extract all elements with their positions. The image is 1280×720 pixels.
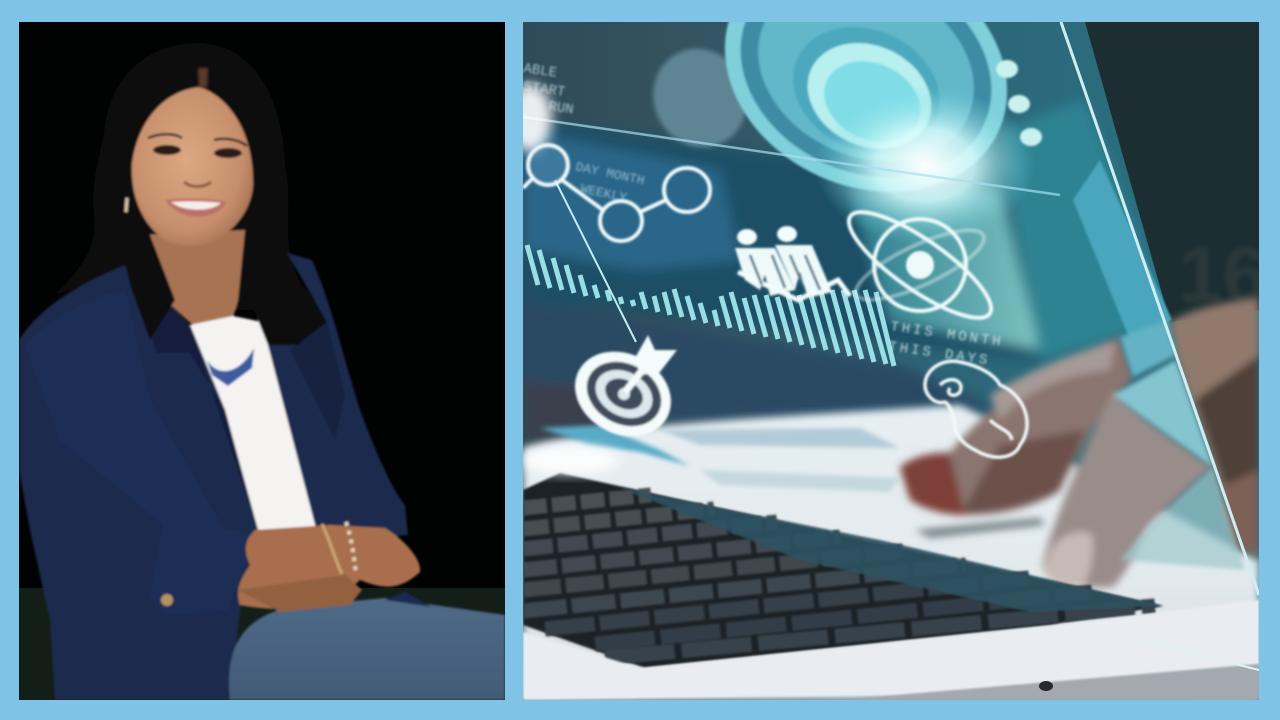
chart area backdrop (523, 120, 1040, 360)
teeth (171, 201, 221, 210)
right lapel shadow (290, 322, 345, 440)
earring (126, 198, 127, 212)
screen text top left (522, 61, 575, 118)
fingernail (1045, 532, 1093, 587)
subject figure (19, 43, 505, 700)
keyboard key rows (523, 495, 1155, 658)
icon: three dots (996, 60, 1042, 146)
left eyebrow (148, 134, 182, 138)
icon: brain (925, 361, 1027, 457)
dark room corner (1085, 22, 1259, 322)
floor behind subject (19, 588, 505, 700)
bar chart (527, 245, 894, 366)
parting (198, 68, 208, 88)
laptop lower edge (840, 664, 1259, 700)
finger shadow on desk (915, 518, 1045, 538)
icon: atom (836, 196, 1004, 334)
pearl bracelet (346, 522, 356, 574)
screen text top left: ABLE (522, 61, 558, 82)
noisy blue patch (523, 130, 740, 270)
sleeve cuff (150, 515, 255, 615)
lips (165, 199, 227, 217)
laptop port (1039, 681, 1053, 691)
icon: people on rising arrow (735, 226, 850, 300)
jacket hem (385, 592, 432, 607)
teal side (1000, 100, 1170, 360)
hands (238, 525, 420, 609)
necklace (207, 348, 254, 386)
oval on screen (637, 33, 763, 163)
finger highlight (990, 342, 1115, 420)
index finger (900, 337, 1133, 515)
screen text beside network (574, 159, 646, 206)
central glow (815, 85, 1035, 245)
laptop palm rest (523, 600, 1259, 700)
lower screen band (524, 305, 990, 417)
screen background (523, 22, 1259, 700)
jacket button (161, 594, 173, 606)
screen text beside network: WEEKLY (579, 181, 628, 206)
deep shadow (1195, 355, 1259, 490)
icon: concentric circles (685, 0, 1047, 237)
corner flare (508, 84, 552, 152)
caption on screen: THIS MONTH (889, 319, 1004, 351)
bracelets (322, 524, 342, 574)
left lapel (150, 305, 247, 495)
left jacket body (19, 265, 258, 700)
screen text top left: START (522, 79, 566, 101)
left shoulder highlight (27, 292, 220, 526)
keyboard (523, 473, 1163, 668)
screen text beside network: DAY MONTH (574, 159, 646, 189)
right finger (1221, 470, 1259, 555)
white top (190, 316, 316, 530)
right eyebrow (214, 139, 247, 146)
caption on screen (887, 319, 1004, 369)
faint background number: 16 (1178, 230, 1267, 319)
lower glass line (1140, 640, 1259, 670)
finger shadow (960, 430, 1085, 515)
face (132, 87, 253, 246)
right eye (214, 148, 242, 158)
screen text top left: RUN (547, 99, 575, 118)
middle finger (1043, 390, 1213, 588)
hair back (55, 43, 327, 352)
atom backdrop (850, 190, 1040, 350)
finger tip red (900, 454, 965, 515)
right glass edge line (1061, 22, 1259, 595)
screen streaks on desk (540, 425, 900, 492)
jeans (229, 598, 505, 700)
glass side panel (1073, 160, 1172, 340)
top right knuckles (1170, 298, 1259, 560)
panel: laptop technology photo (508, 0, 1267, 700)
neck (143, 230, 245, 327)
screen top line (523, 117, 1060, 195)
pointer line to target (555, 180, 636, 342)
dark lower left (523, 380, 596, 438)
left eye (153, 145, 181, 155)
icon: target with arrow (560, 335, 686, 453)
caption on screen: THIS DAYS (887, 339, 991, 369)
icon: network graph (523, 145, 710, 241)
panel: portrait photo (19, 22, 505, 700)
lower hand (238, 575, 362, 612)
blurred screen colours (523, 100, 1170, 440)
right jacket body (262, 253, 408, 540)
glass tint pieces (1113, 320, 1245, 570)
hand (900, 298, 1259, 588)
nose (184, 182, 211, 186)
desk glare (520, 446, 620, 474)
keyboard function strip (620, 488, 1163, 612)
desk and laptop base (523, 405, 1259, 700)
hair front sides (116, 60, 300, 345)
